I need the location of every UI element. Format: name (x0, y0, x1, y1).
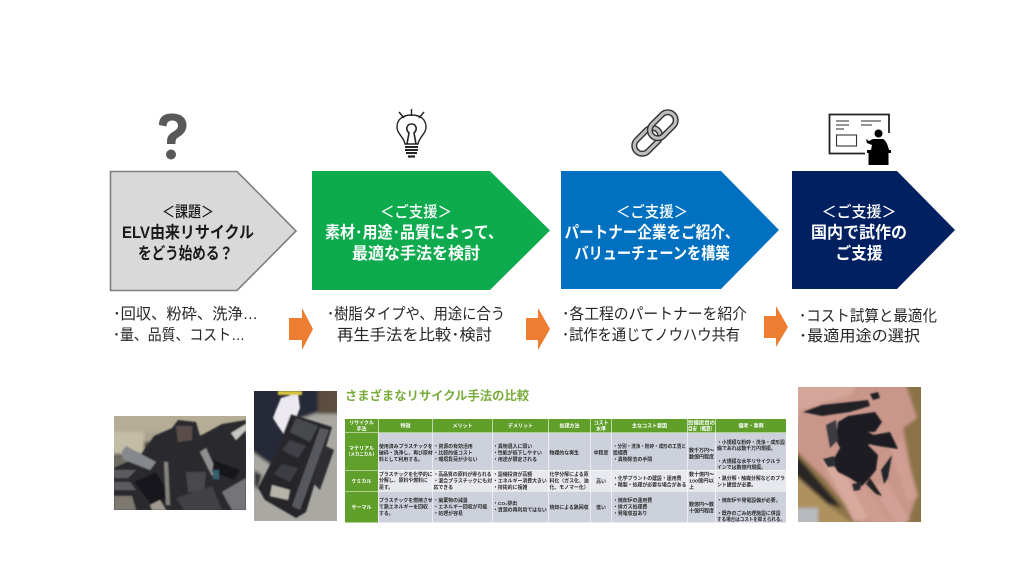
row: thermal recycling: ・CO₂排出 (493, 500, 517, 507)
table header row: 処理方法 (559, 422, 580, 430)
row: material recycling: ・大規模な水平リサイクルラ (717, 458, 780, 465)
row: material recycling: ・用途が限定される (493, 456, 537, 463)
panel: support chevron, partners: バリューチェーンを構築 (574, 244, 730, 263)
icon: light bulb (397, 109, 426, 156)
row: chemical recycling: 応できる (434, 484, 453, 491)
icon: question mark (159, 114, 186, 160)
row: thermal recycling: サーマル (351, 505, 372, 511)
row: chemical recycling: ・設備投資が高額 (493, 471, 532, 478)
row: thermal recycling: プラスチックを燃焼させ (379, 497, 433, 504)
panel: support chevron, method review: 素材･用途･品質によって、 (325, 223, 503, 242)
infographic canvas (110, 109, 955, 522)
row: thermal recycling: ・発電収益あり (613, 510, 647, 517)
row: material recycling: ・異物除去の手間 (613, 456, 652, 463)
arrow: orange 1 (289, 308, 313, 350)
row: thermal recycling: する場合はコストを抑えられる。 (717, 516, 785, 523)
table header row (345, 419, 786, 432)
table header row: 特徴 (400, 422, 411, 430)
panel: support chevron, method review: ＜ご支援＞ (380, 203, 452, 221)
row: chemical recycling (352, 471, 785, 491)
row: chemical recycling: ・高品質の原料が得られる (434, 471, 492, 478)
text block: method points: 再生手法を比較･検討 (337, 326, 492, 344)
text block: challenge points: ･量、品質、コスト… (113, 326, 245, 344)
row: material recycling: インでは数億円規模。 (717, 464, 766, 471)
row: thermal recycling: する。 (379, 510, 394, 517)
row: chemical recycling: 数十億円～ (689, 471, 714, 478)
arrow: orange 2 (526, 308, 550, 350)
panel: support chevron, prototyping: ＜ご支援＞ (822, 203, 896, 221)
photo: recycled black plastic flakes in hand (798, 387, 921, 522)
panel: challenge chevron (110, 172, 296, 290)
row: chemical recycling: ・エネルギー消費大きい (493, 478, 547, 484)
row: chemical recycling: プラスチックを化学的に (379, 471, 433, 478)
panel: support chevron, prototyping (792, 171, 955, 289)
row: material recycling (346, 439, 785, 471)
table header row: 備考・事例 (738, 422, 764, 430)
row: material recycling: （メカニカル） (346, 451, 377, 458)
text block: method points (327, 305, 505, 344)
row: thermal recycling: 数億円～数 (689, 501, 714, 508)
heading: recycling method comparison: さまざまなリサイクル手法の比較 (345, 388, 530, 403)
text block: challenge points (113, 305, 258, 344)
icon: presenter at whiteboard (830, 114, 891, 165)
panel: support chevron, partners: パートナー企業をご紹介、 (564, 223, 740, 242)
row: chemical recycling: ケミカル (352, 478, 371, 485)
table header row: メリット (452, 424, 473, 430)
row: material recycling: ・比較的低コスト (434, 450, 473, 456)
row: chemical recycling: ・技術的に複雑 (493, 484, 527, 491)
table row backgrounds (345, 419, 786, 522)
row: chemical recycling: 100億円以 (689, 478, 714, 484)
row: chemical recycling: 化、モノマー化） (550, 484, 589, 491)
row: material recycling: マテリアル (349, 446, 374, 452)
row: thermal recycling: ・エネルギー回収が可能 (434, 504, 487, 510)
row: chemical recycling: ・精製・処理が必要な場合がある (613, 482, 686, 488)
text block: challenge points: ･回収、粉砕、洗浄… (113, 305, 258, 323)
row: thermal recycling: て熱エネルギーを回収 (379, 504, 428, 510)
photo: pile of intake manifolds (114, 416, 246, 510)
table header row: 主なコスト要因 (632, 422, 667, 430)
row: thermal recycling: 低い (596, 504, 606, 511)
table header row: コスト (593, 420, 609, 426)
row: thermal recycling: ・焼却炉や発電設備が必要。 (717, 497, 781, 504)
row: thermal recycling: ・資源の再利用ではない (493, 506, 547, 514)
row: chemical recycling: 高い (596, 478, 606, 485)
text block: prototyping points: ･最適用途の選択 (799, 327, 921, 345)
panel: support chevron, prototyping: ご支援 (836, 244, 882, 263)
row: thermal recycling: ・排ガス処理費 (613, 504, 647, 510)
table header row: 手法 (356, 426, 367, 432)
table: recycling method comparison (345, 419, 786, 523)
row: material recycling: 破砕・洗浄し、再び原材 (379, 450, 433, 456)
row: material recycling: 数千万円～ (689, 447, 714, 454)
row: chemical recycling: 上 (689, 484, 694, 491)
text block: method points: ･樹脂タイプや、用途に合う (327, 305, 505, 323)
row: material recycling: ・資源の有効活用 (434, 443, 473, 450)
text block: prototyping points: ･コスト試算と最適化 (799, 306, 937, 325)
panel: support chevron, partners: ＜ご支援＞ (616, 203, 688, 221)
table header row: デメリット (508, 422, 533, 430)
text block: partner points (562, 305, 747, 344)
row: chemical recycling: 料化（ガス化、油 (550, 478, 589, 484)
row: material recycling: ・異物混入に弱い (493, 443, 532, 450)
row: thermal recycling: ・処理が容易 (434, 510, 463, 517)
row: thermal recycling: ・既存のごみ処理施設に併設 (717, 510, 781, 517)
row: material recycling: ・小規模な粉砕・洗浄・成形設 (717, 439, 785, 446)
row: material recycling: ・性能が低下しやすい (493, 450, 542, 456)
icon: chain links (631, 109, 679, 157)
row: material recycling: 備であれば数千万円規模。 (717, 445, 776, 452)
panel: challenge chevron: ＜課題＞ (162, 203, 214, 221)
row: chemical recycling: ・混合プラスチックにも対 (434, 478, 492, 484)
row: thermal recycling: ・廃棄物の減量 (434, 497, 468, 504)
row: chemical recycling: ント建設が必要。 (717, 482, 756, 488)
row: chemical recycling: 化学分解による原 (550, 471, 589, 478)
text block: partner points: ･各工程のパートナーを紹介 (562, 305, 747, 323)
row: thermal recycling (351, 497, 785, 523)
row: material recycling: 料として利用する。 (379, 456, 423, 463)
table header row: リサイクル (349, 420, 374, 426)
row: material recycling: 物理的な再生 (550, 450, 579, 456)
panel: support chevron, method review: 最適な手法を検討 (352, 244, 480, 263)
row: material recycling: ・分別・洗浄・粉砕・成形の工賃と (613, 443, 686, 450)
row: chemical recycling: ・化学プラントの建設・運用費 (613, 475, 682, 482)
row: thermal recycling: 十億円程度 (689, 508, 714, 514)
row: material recycling: 中程度 (594, 450, 608, 456)
row: material recycling: 数億円程度 (689, 454, 714, 460)
panel: support chevron, partners (561, 171, 779, 289)
row: chemical recycling: 分解し、原料や燃料に (379, 477, 428, 484)
text block: prototyping points (799, 306, 937, 345)
table header row: 目安（概算） (688, 426, 715, 432)
row: thermal recycling: 焼却による熱回収 (550, 504, 589, 511)
row: material recycling: 使用済みプラスチックを (379, 443, 433, 450)
row: chemical recycling: 戻す。 (379, 484, 393, 491)
panel: support chevron, prototyping: 国内で試作の (811, 224, 907, 242)
row: thermal recycling: ・焼却炉の運用費 (613, 497, 652, 504)
row: material recycling: 設備費 (613, 450, 628, 456)
panel: challenge chevron: ELV由来リサイクル (122, 224, 254, 242)
photo: gloved hand holding manifold (254, 391, 337, 521)
text block: partner points: ･試作を通じてノウハウ共有 (562, 326, 740, 344)
table header row: 水準 (596, 426, 606, 432)
row: material recycling: ・環境負荷が少ない (434, 456, 478, 463)
panel: support chevron, method review (312, 171, 550, 290)
panel: challenge chevron: をどう始める？ (138, 244, 233, 263)
arrow: orange 3 (764, 306, 788, 347)
row: chemical recycling: ・熱分解・触媒分解などのプラ (717, 475, 785, 482)
table header row: 設備投資の (688, 420, 715, 426)
